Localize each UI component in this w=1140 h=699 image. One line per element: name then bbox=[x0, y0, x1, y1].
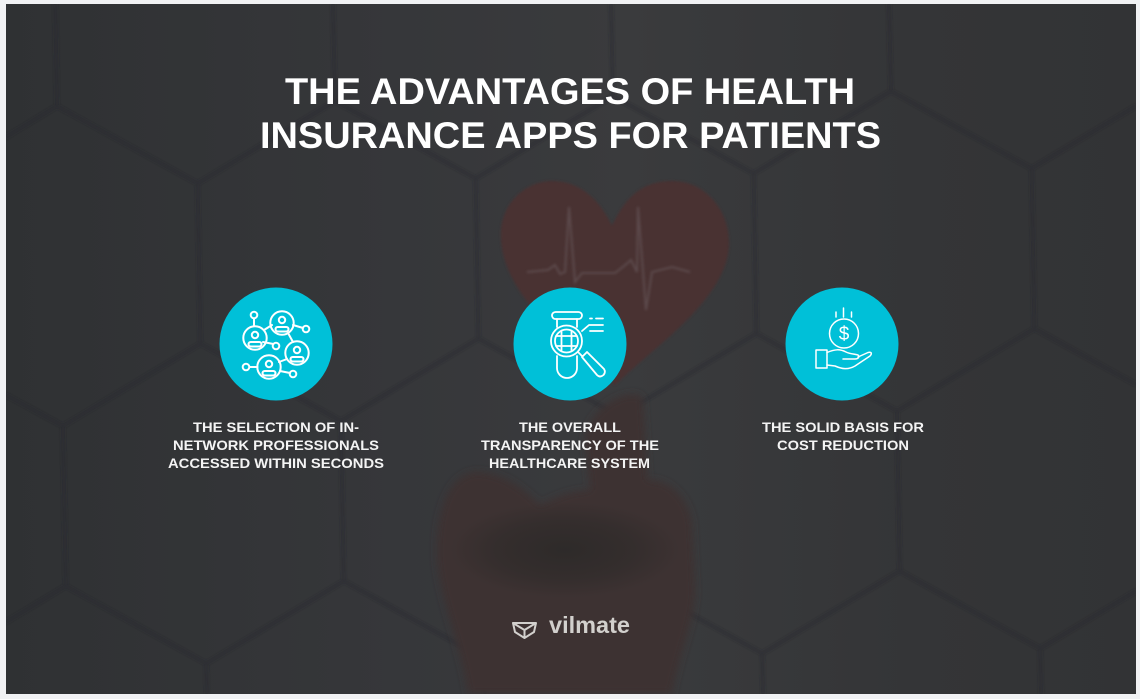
caption: TRANSPARENCY OF THE bbox=[481, 438, 659, 453]
logo: vilmate: vilmate bbox=[549, 612, 630, 638]
caption bbox=[481, 420, 659, 471]
icon: logo envelope bbox=[513, 623, 536, 638]
title: INSURANCE APPS FOR PATIENTS bbox=[260, 115, 881, 156]
item 3: cost reduction bbox=[762, 288, 924, 453]
caption: COST REDUCTION bbox=[777, 438, 909, 453]
title bbox=[260, 71, 881, 156]
icon: coin above open hand bbox=[786, 288, 898, 400]
caption: ACCESSED WITHIN SECONDS bbox=[168, 456, 384, 471]
caption bbox=[762, 420, 924, 453]
caption bbox=[168, 420, 384, 471]
icon: test tube under magnifier bbox=[514, 288, 626, 400]
caption: NETWORK PROFESSIONALS bbox=[173, 438, 379, 453]
item 1: in-network professionals bbox=[168, 288, 384, 471]
background heart with pulse line bbox=[501, 181, 729, 385]
caption: THE OVERALL bbox=[519, 420, 621, 435]
item 2: transparency bbox=[481, 288, 659, 471]
caption: HEALTHCARE SYSTEM bbox=[489, 456, 650, 471]
icon: coin above open hand: $ bbox=[839, 324, 850, 345]
logo: vilmate bbox=[513, 612, 630, 638]
background hand pointing at heart bbox=[437, 394, 695, 694]
caption: THE SOLID BASIS FOR bbox=[762, 420, 924, 435]
title: THE ADVANTAGES OF HEALTH bbox=[285, 71, 855, 112]
caption: THE SELECTION OF IN- bbox=[193, 420, 359, 435]
icon: connected people network bbox=[220, 288, 332, 400]
